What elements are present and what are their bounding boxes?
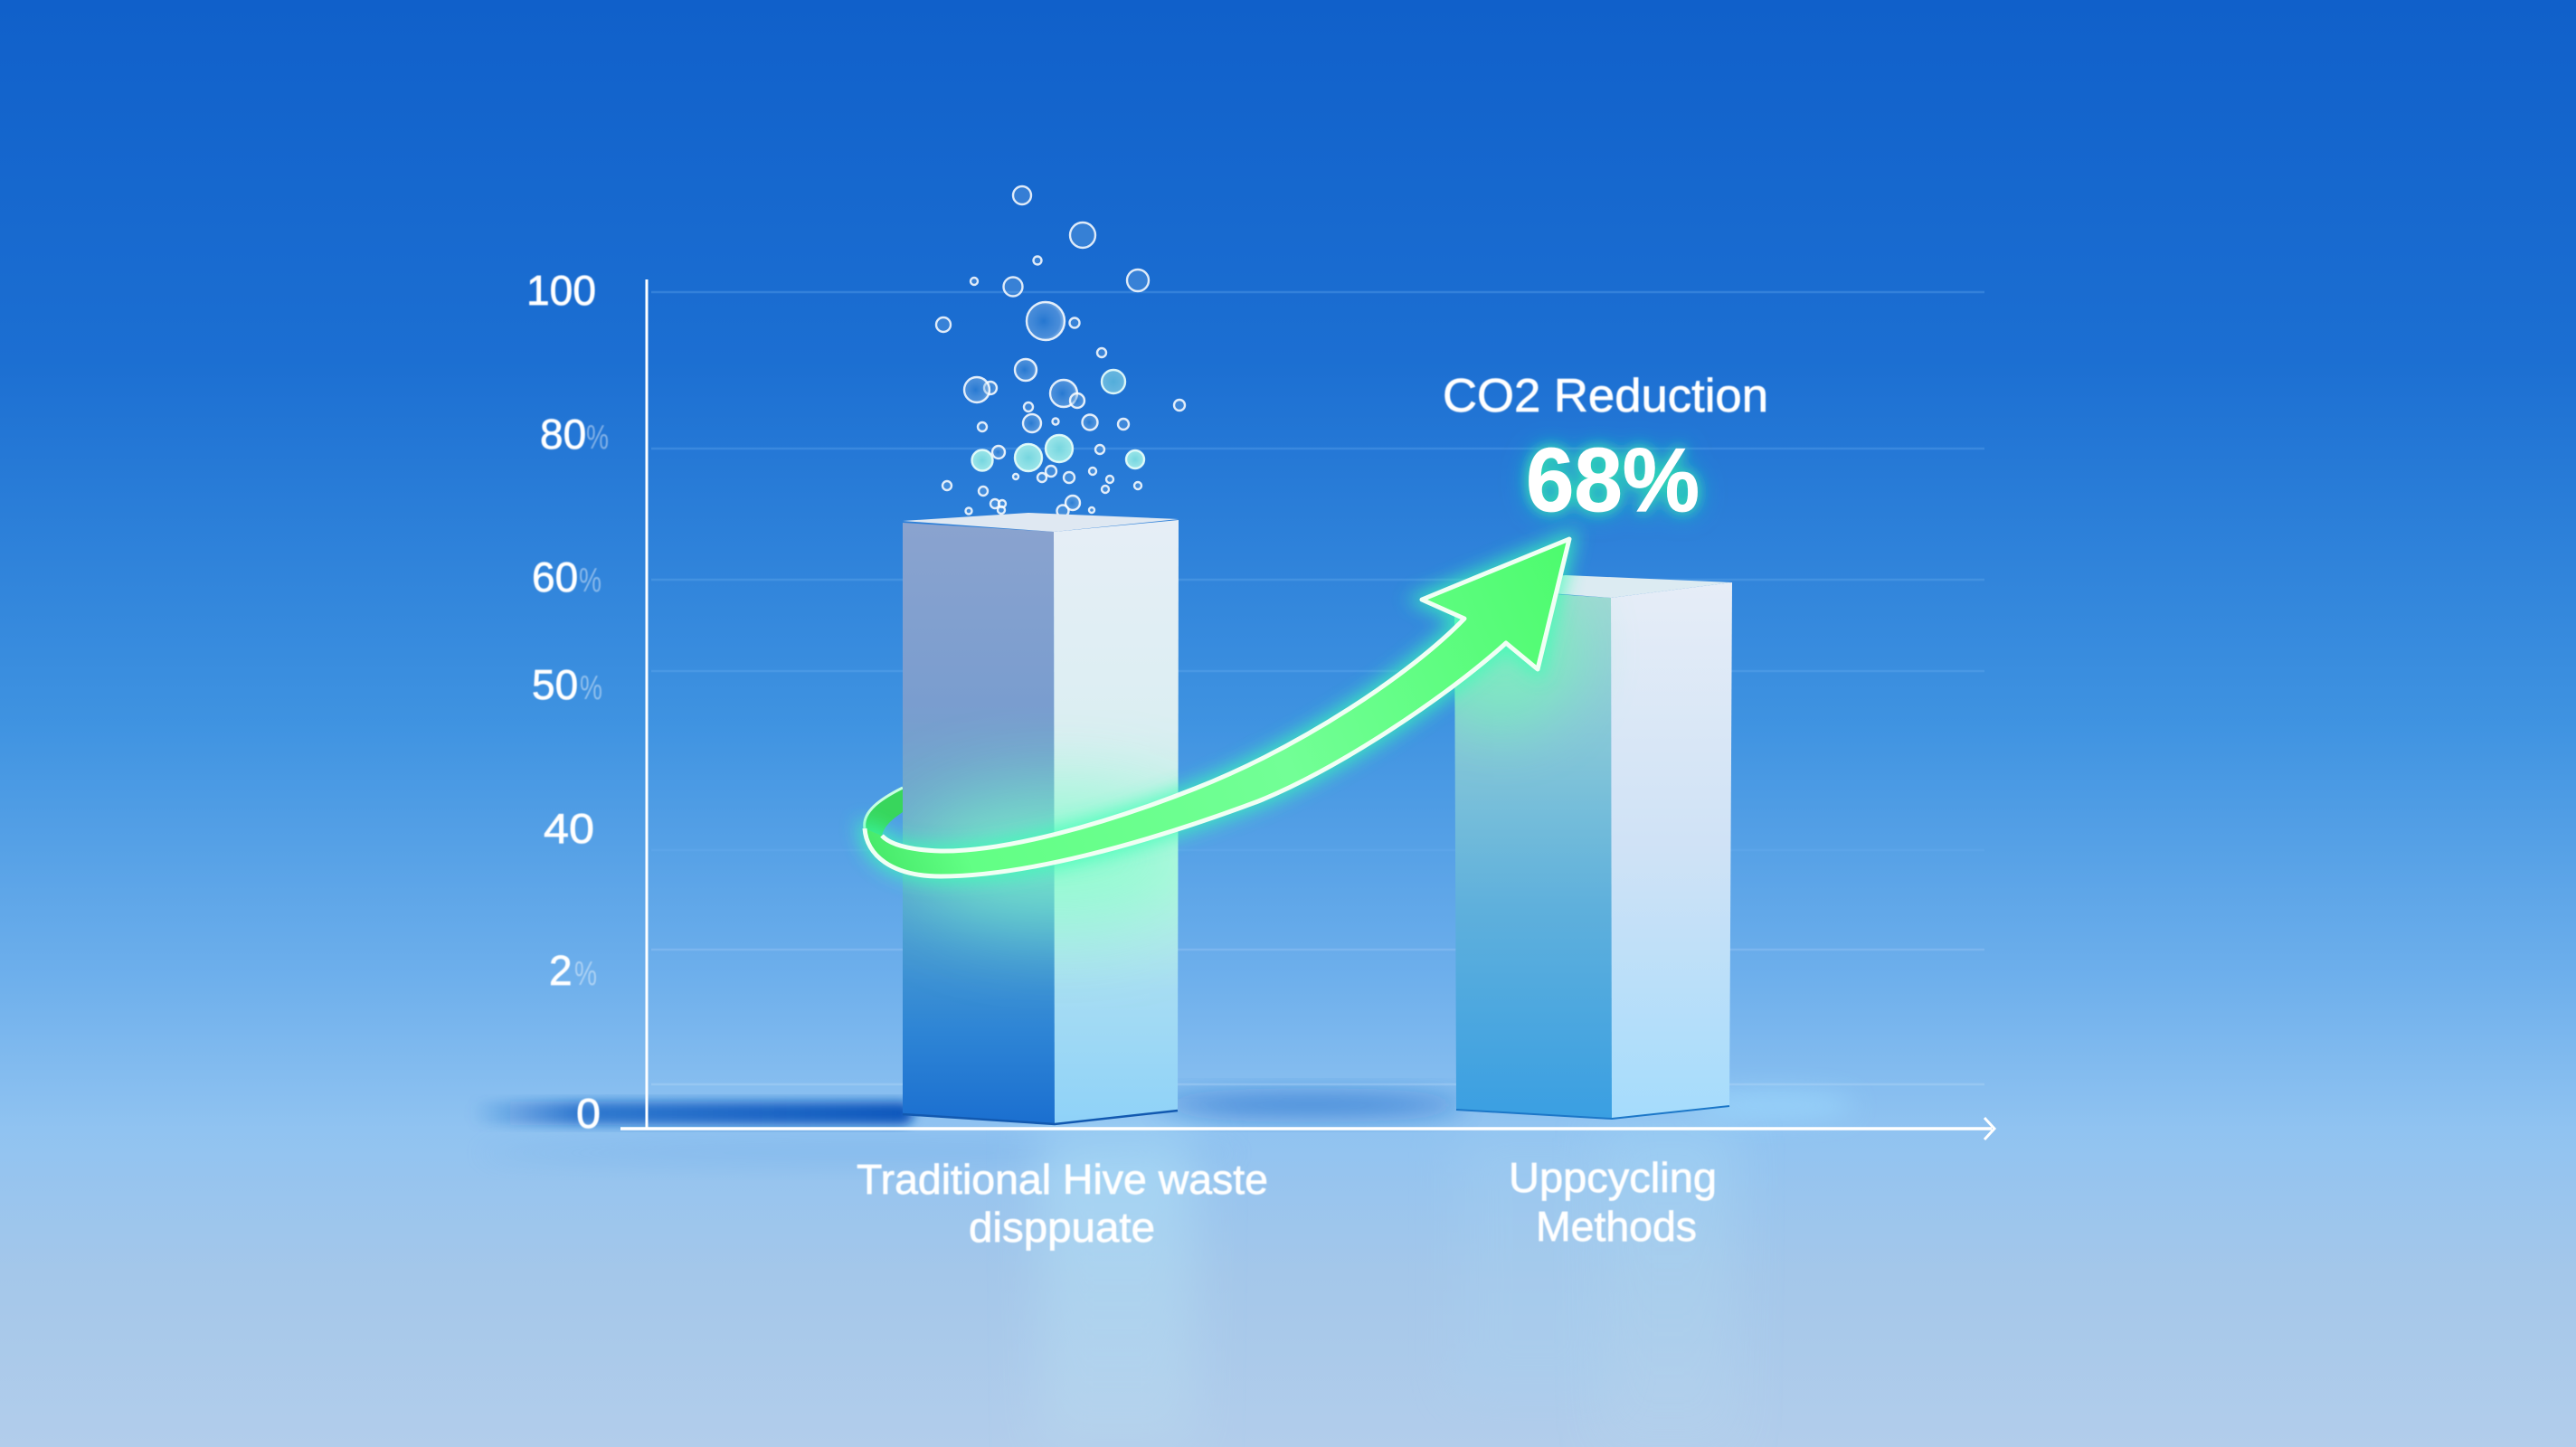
y axis labels: 2 [549,947,573,994]
category label: upcycling: Methods [1536,1203,1697,1250]
bar: upcycling methods [1454,575,1732,1120]
category label: traditional: Traditional Hive waste [857,1156,1268,1203]
y axis labels: 50 [532,661,578,708]
category label: traditional: disppuate [969,1204,1155,1251]
callout: CO2 reduction 68%: 68% [1526,430,1700,531]
floor shadows and reflections [470,1092,1854,1447]
y axis labels: 60 [532,553,578,601]
callout: CO2 reduction 68%: CO2 Reduction [1443,370,1768,422]
y axis labels: % [580,669,602,707]
y axis labels: 100 [526,267,596,314]
y axis labels [526,267,609,1137]
bar: traditional hive waste disposal [903,513,1179,1125]
green arrow showing reduction [865,539,1569,876]
bubbles rising from traditional bar [936,186,1185,517]
y axis labels: % [586,419,609,457]
y axis labels: 80 [540,411,586,458]
category label: traditional [857,1156,1268,1251]
y axis labels: 0 [576,1090,601,1137]
axes [620,279,1994,1140]
gridlines [651,292,1984,1084]
category label: upcycling [1509,1154,1717,1250]
y axis labels: % [579,562,601,600]
category label: upcycling: Uppcycling [1509,1154,1717,1201]
y axis labels: 40 [544,805,594,852]
arrow tail behind bar [865,788,903,836]
callout: CO2 reduction 68% [1443,370,1768,531]
y axis labels: % [574,955,597,993]
